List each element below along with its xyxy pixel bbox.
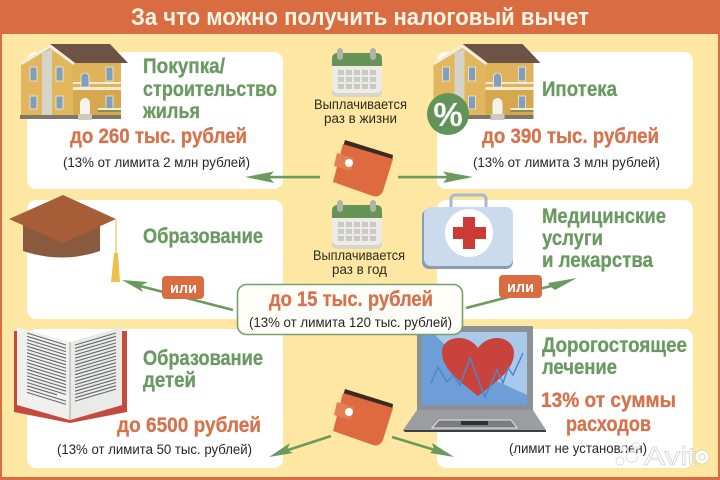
amount: 390 thousand: до 390 тыс. рублей bbox=[482, 125, 659, 148]
heading: home purchase: жилья bbox=[142, 100, 200, 123]
amount: 13 percent of expenses: 13% от суммы bbox=[541, 389, 676, 412]
heading: home purchase: Покупка/ bbox=[143, 55, 225, 78]
icon: graduation cap bbox=[9, 195, 120, 282]
caption: once a year: раз в год bbox=[332, 262, 387, 277]
icon: calendar once in a lifetime bbox=[332, 48, 382, 97]
note: no limit: (лимит не установлен) bbox=[509, 440, 647, 456]
amount: 15 thousand: до 15 тыс. рублей bbox=[269, 288, 433, 311]
title: За что можно получить налоговый вычет bbox=[131, 4, 589, 31]
icon: house with percent badge bbox=[427, 44, 540, 135]
panel: home purchase bbox=[20, 44, 283, 189]
note: 3 million limit: (13% от лимита 3 млн рублей) bbox=[473, 154, 660, 170]
heading: medical services: услуги bbox=[542, 227, 603, 250]
arrow: to education bbox=[122, 280, 233, 310]
heading: expensive treatment bbox=[542, 334, 687, 379]
amount: 13 percent of expenses bbox=[541, 389, 676, 436]
caption: once in a lifetime bbox=[314, 97, 407, 126]
caption: once in a lifetime: Выплачивается bbox=[314, 97, 407, 112]
icon: house with percent badge: % bbox=[433, 96, 463, 133]
icon: laptop with heart bbox=[403, 326, 546, 432]
caption: once a year: Выплачивается bbox=[313, 248, 405, 263]
note: 120 thousand limit: (13% от лимита 120 тыс. рублей) bbox=[249, 314, 452, 330]
arrow: to home purchase bbox=[245, 172, 320, 183]
panel: education bbox=[9, 195, 283, 319]
arrow: to mortgage bbox=[398, 172, 473, 183]
panel: mortgage bbox=[427, 44, 693, 189]
icon: wallet upper bbox=[333, 140, 393, 196]
badge: or, left: или bbox=[170, 280, 197, 297]
heading: mortgage: Ипотека bbox=[542, 78, 617, 101]
heading: home purchase: строительство bbox=[143, 78, 277, 101]
heading: education: Образование bbox=[143, 225, 263, 248]
icon: calendar once a year bbox=[332, 200, 382, 249]
heading: medical services bbox=[542, 205, 666, 272]
amount: 13 percent of expenses: расходов bbox=[566, 413, 651, 436]
caption: once in a lifetime: раз в жизни bbox=[324, 111, 397, 126]
badge: or, left bbox=[162, 276, 204, 299]
watermark: Avito bbox=[616, 441, 709, 471]
caption: once a year bbox=[313, 248, 405, 277]
note: 50 thousand limit: (13% от лимита 50 тыс. рублей) bbox=[57, 441, 252, 457]
heading: children's education: Образование bbox=[143, 347, 263, 370]
arrow: to expensive treatment bbox=[392, 437, 454, 457]
heading: expensive treatment: Дорогостоящее bbox=[542, 334, 687, 357]
badge: or, right: или bbox=[507, 279, 534, 296]
icon: first aid kit bbox=[422, 195, 513, 269]
heading: children's education bbox=[143, 347, 263, 392]
panel: children's education bbox=[14, 327, 283, 468]
heading: expensive treatment: лечение bbox=[542, 356, 617, 379]
icon: wallet lower bbox=[333, 389, 393, 445]
heading: children's education: детей bbox=[143, 369, 196, 392]
icon: house bbox=[20, 44, 128, 120]
arrow: to children's education bbox=[269, 436, 331, 457]
badge: or, right bbox=[499, 275, 542, 298]
watermark: Avito: Avit bbox=[644, 441, 697, 471]
icon: open book bbox=[14, 327, 127, 423]
amount: 6500 roubles: до 6500 рублей bbox=[117, 414, 261, 437]
note: 2 million limit: (13% от лимита 2 млн рублей) bbox=[63, 154, 250, 170]
callout: 15 thousand roubles bbox=[238, 284, 462, 334]
heading: medical services: и лекарства bbox=[542, 249, 653, 272]
heading: medical services: Медицинские bbox=[542, 205, 666, 228]
arrow: to medical services bbox=[466, 278, 577, 308]
panel: expensive treatment bbox=[403, 326, 693, 468]
panel: medical services bbox=[422, 195, 693, 319]
heading: home purchase bbox=[142, 55, 277, 123]
amount: 260 thousand: до 260 тыс. рублей bbox=[70, 125, 247, 148]
